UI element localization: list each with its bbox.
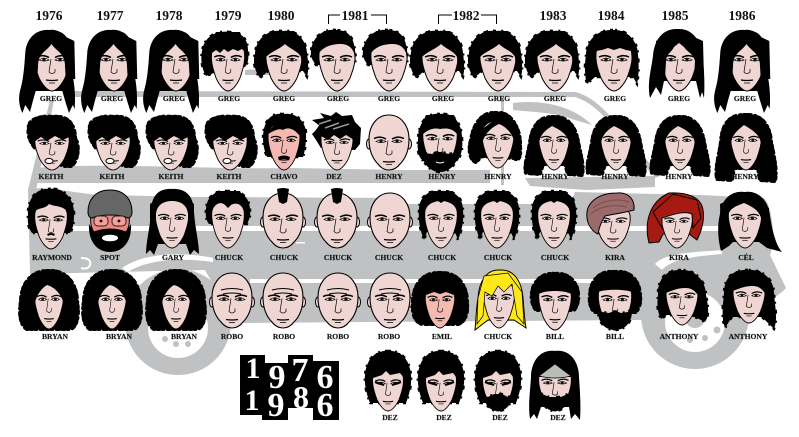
portrait: Bill bearded [590, 272, 640, 341]
year headings: 1976 [36, 8, 63, 23]
portrait: Keith 1979: KEITH [217, 172, 242, 181]
portrait: Greg 1982 b [468, 31, 522, 103]
portrait: Keith 1976 [28, 117, 78, 181]
portrait: Henry long 1986 [716, 115, 776, 181]
portrait: Henry long 1984: HENRY [601, 172, 629, 181]
portrait: Chuck 1982 a [419, 191, 463, 262]
van windows stripes and wheels [72, 226, 725, 358]
portrait: Chuck mohawk a: CHUCK [270, 253, 298, 262]
year headings: 1978 [156, 8, 183, 23]
portrait: Dez long fringe [418, 351, 464, 422]
portrait: Kira red hair: KIRA [669, 253, 689, 262]
portrait: Anthony 2: ANTHONY [729, 332, 768, 341]
1976-1986 logo block [240, 352, 339, 424]
1976-1986 logo block: 6 [316, 359, 334, 396]
portrait: Bryan 1 [20, 271, 78, 341]
portrait: Bill: BILL [546, 332, 564, 341]
portrait: Greg 1983 [525, 31, 579, 103]
row 2: guitar and vocals [28, 112, 776, 181]
portrait: Chuck bald [368, 193, 412, 262]
portrait: Chavo [263, 114, 306, 181]
1976-1986 logo block: 1 [246, 352, 260, 385]
portrait: Greg 1982 b: GREG [488, 94, 510, 103]
portrait: Henry long 1983: HENRY [541, 172, 569, 181]
portrait: Greg 1978: GREG [163, 94, 185, 103]
portrait: Keith 1978: KEITH [159, 172, 184, 181]
portrait: Cel [718, 192, 782, 262]
portrait: Dez 1981 [312, 112, 361, 181]
portrait: Henry curly [470, 113, 520, 181]
portrait: Dez headband [529, 351, 580, 422]
portrait: Robo 1: ROBO [221, 332, 243, 341]
portrait: Keith 1976: KEITH [39, 172, 64, 181]
portrait: Greg 1979: GREG [218, 94, 240, 103]
portrait: Greg 1983: GREG [544, 94, 566, 103]
portrait: Greg 1981 a [311, 30, 356, 103]
portrait: Chuck mohawk b [314, 188, 360, 262]
portrait: Keith 1979 [206, 117, 256, 181]
portrait: Bryan 3: BRYAN [171, 332, 198, 341]
portrait: Bill [532, 274, 578, 341]
year headings: 1982 [452, 8, 480, 23]
portrait: Chuck 1983: CHUCK [541, 253, 569, 262]
year headings: 1979 [214, 8, 242, 23]
portrait: Robo 1 [210, 273, 254, 341]
portrait: Raymond [28, 189, 74, 262]
portrait: Chuck 1982 b: CHUCK [484, 253, 512, 262]
portrait: Emil [413, 273, 467, 341]
portrait: Greg 1984: GREG [604, 94, 626, 103]
portrait: Robo 2: ROBO [273, 332, 295, 341]
portrait: Henry bald [366, 115, 412, 181]
portrait: Henry bearded: HENRY [428, 172, 456, 181]
portrait: Greg 1976 [19, 30, 75, 113]
background van illustration [28, 68, 786, 375]
portrait: Bryan 2: BRYAN [106, 332, 133, 341]
portrait: Henry long 1984 [587, 117, 645, 181]
portrait: Greg 1982 a: GREG [432, 94, 454, 103]
portrait: Greg 1980: GREG [273, 94, 295, 103]
year headings: 1980 [268, 8, 295, 23]
portrait: Chuck yellow hair: CHUCK [484, 332, 512, 341]
portrait: Robo 4: ROBO [378, 332, 400, 341]
1976-1986 logo block: 8 [293, 379, 309, 415]
1976-1986 logo block: 9 [268, 359, 286, 396]
portrait: Dez 1981: DEZ [326, 172, 342, 181]
portrait: Dez bearded: DEZ [492, 413, 508, 422]
portrait: Henry long 1983 [525, 117, 583, 181]
portrait: Emil: EMIL [432, 332, 452, 341]
portrait: Dez short hair: DEZ [382, 413, 398, 422]
portrait: Henry long 1986: HENRY [731, 172, 759, 181]
portrait: Chuck short hair [206, 191, 250, 262]
portrait: Bryan 3 [147, 271, 205, 341]
year headings: 1986 [728, 8, 756, 23]
portrait: Kira red hair [647, 193, 704, 262]
year headings: 1983 [540, 8, 567, 23]
portrait: Kira brown hair: KIRA [605, 253, 625, 262]
portrait: Greg 1985 [649, 29, 704, 103]
row 4: drums [20, 270, 776, 341]
portrait: Dez short hair [365, 351, 411, 422]
1976-1986 logo block: 6 [316, 387, 334, 424]
portrait: Keith 1977 [89, 117, 139, 181]
portrait: Greg 1980 [254, 31, 308, 103]
portrait: Greg 1981 a: GREG [327, 94, 349, 103]
portrait: Raymond: RAYMOND [32, 253, 72, 262]
portrait: Greg 1977: GREG [101, 94, 123, 103]
row 1: vocals [19, 29, 770, 113]
year headings [36, 8, 756, 24]
portrait: Spot: SPOT [100, 253, 120, 262]
portrait: Greg 1986: GREG [734, 94, 756, 103]
portrait: Greg 1981 b [363, 30, 408, 103]
portrait: Bryan 2 [83, 271, 141, 341]
portrait: Chuck yellow hair [475, 270, 526, 341]
portrait: Robo 2 [260, 273, 306, 341]
1976-1986 logo block: 1 [244, 384, 260, 417]
portrait: Gary [146, 189, 199, 262]
portrait: Greg 1982 a [410, 31, 464, 103]
portrait: Dez long fringe: DEZ [436, 413, 452, 422]
portrait: Greg 1976: GREG [40, 94, 62, 103]
year headings: 1984 [598, 8, 625, 23]
1976-1986 logo block: 7 [292, 352, 308, 389]
portrait: Henry long 1985: HENRY [665, 172, 693, 181]
portrait: Bill bearded: BILL [606, 332, 624, 341]
portrait: Henry bald: HENRY [375, 172, 403, 181]
portrait: Anthony 1 [657, 270, 708, 341]
portrait: Chuck short hair: CHUCK [215, 253, 243, 262]
portrait: Greg 1978 [143, 30, 199, 113]
portrait: Greg 1979 [201, 32, 248, 103]
portrait: Cel: CÉL [738, 252, 754, 262]
portrait: Kira brown hair [587, 193, 634, 262]
portrait: Chuck 1982 a: CHUCK [428, 253, 456, 262]
portrait: Robo 3: ROBO [327, 332, 349, 341]
portrait: Chuck mohawk b: CHUCK [324, 253, 352, 262]
portrait: Robo 4 [368, 273, 412, 341]
portrait: Chavo: CHAVO [270, 172, 298, 181]
portrait: Keith 1977: KEITH [100, 172, 125, 181]
row 3: bass [28, 188, 782, 262]
1976-1986 logo block: 9 [268, 387, 284, 424]
portrait: Chuck 1982 b [475, 191, 519, 262]
portrait: Greg 1985: GREG [668, 94, 690, 103]
portrait: Robo 3 [316, 273, 360, 341]
portrait: Henry curly: HENRY [484, 172, 512, 181]
portrait: Anthony 2 [723, 270, 776, 341]
portrait: Greg 1986 [714, 30, 770, 113]
year headings: 1985 [662, 8, 689, 23]
portrait: Dez bearded [475, 351, 521, 422]
portrait: Spot [88, 190, 132, 262]
row 5: Dez [365, 351, 580, 422]
portrait: Gary: GARY [162, 253, 185, 262]
year headings: 1981 [342, 8, 369, 23]
portrait: Greg 1984 [585, 30, 639, 103]
portrait: Anthony 1: ANTHONY [660, 332, 699, 341]
portrait: Henry long 1985 [651, 117, 709, 181]
portrait: Chuck mohawk a [260, 188, 306, 262]
portrait: Dez headband: DEZ [550, 413, 566, 422]
portrait: Keith 1978 [147, 117, 197, 181]
portrait: Bryan 1: BRYAN [42, 332, 69, 341]
portrait: Chuck bald: CHUCK [375, 253, 403, 262]
portrait: Chuck 1983 [532, 191, 576, 262]
year headings: 1977 [96, 8, 124, 23]
portrait: Greg 1977 [81, 30, 137, 113]
portrait: Greg 1981 b: GREG [378, 94, 400, 103]
portrait: Henry bearded [418, 114, 462, 181]
